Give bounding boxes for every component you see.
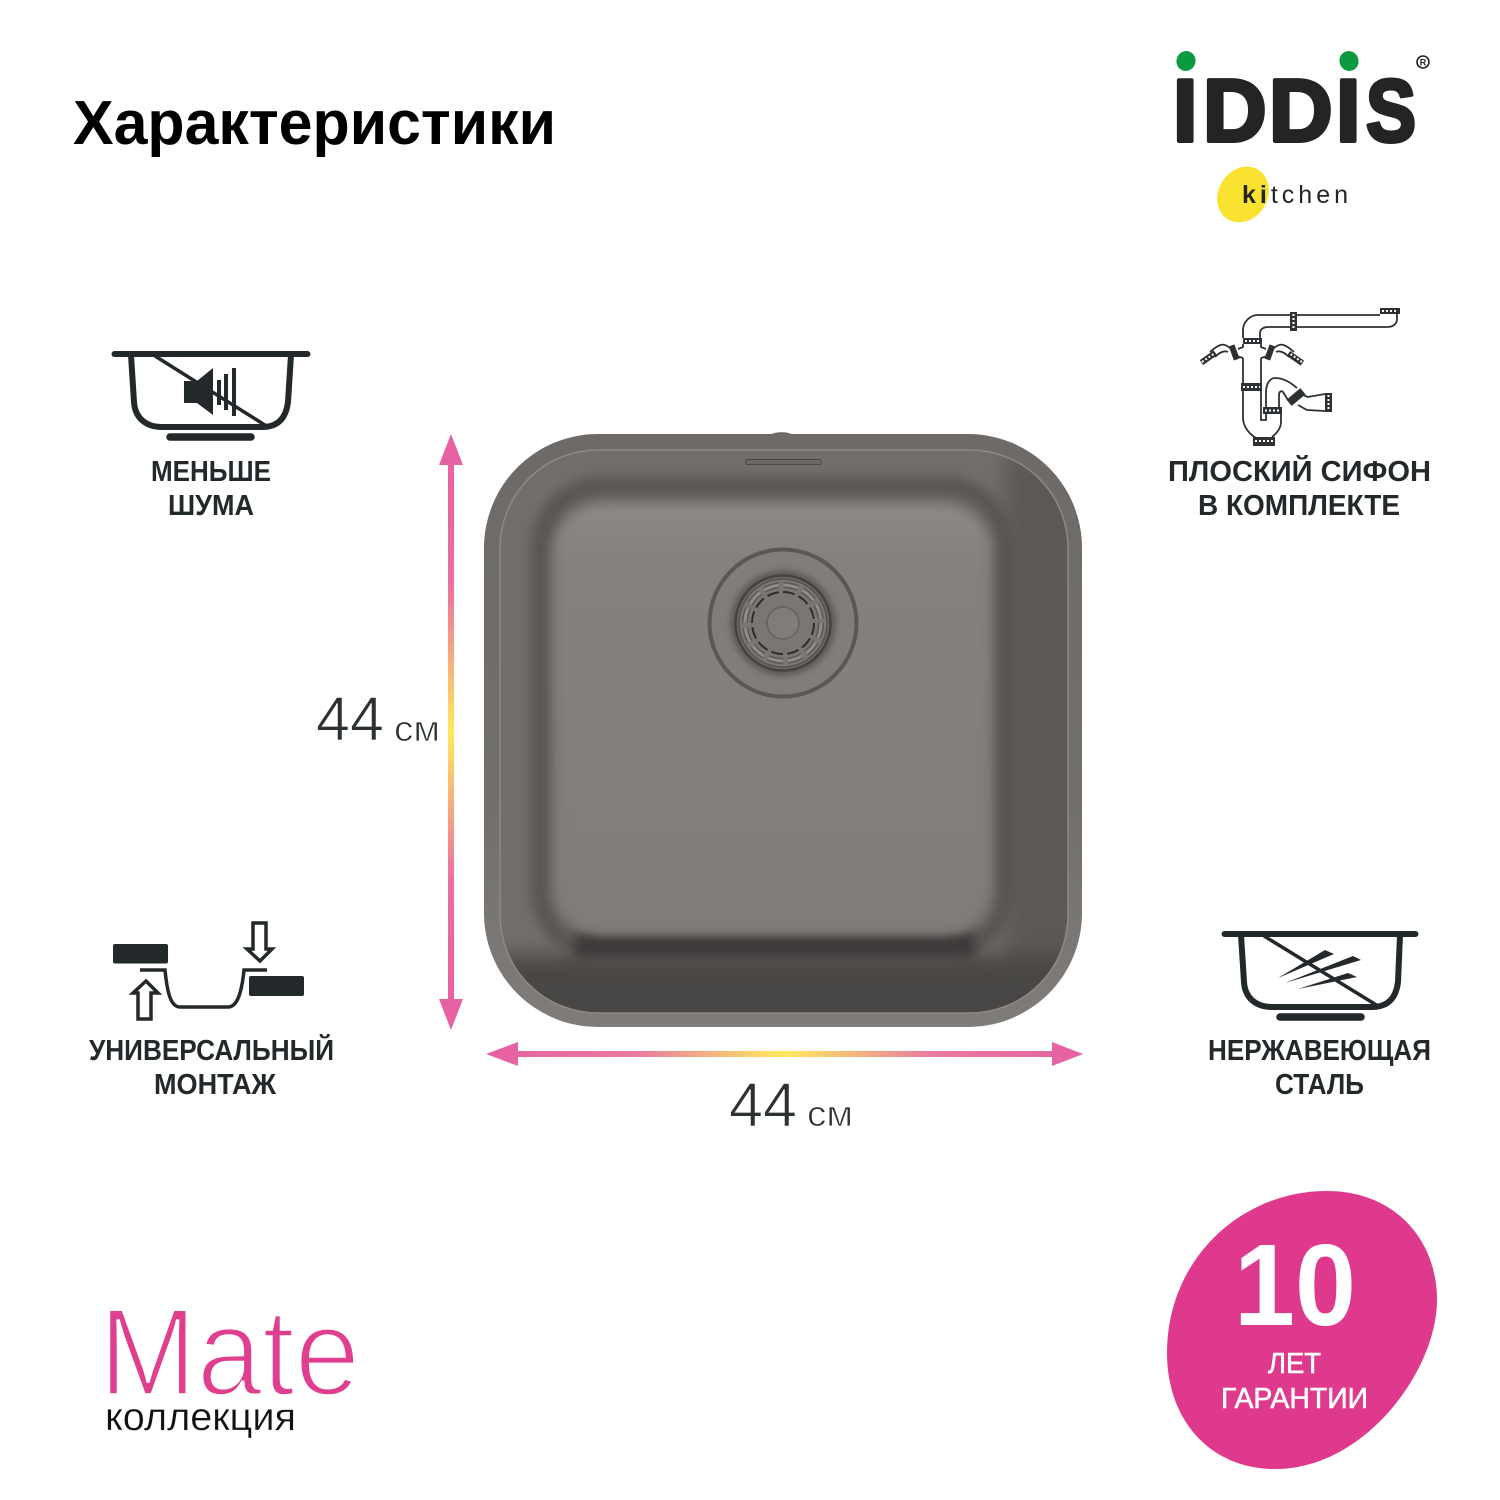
warranty text: ЛЕТ xyxy=(1268,1348,1321,1380)
height label xyxy=(316,685,440,754)
label: less noise: МЕНЬШЕ xyxy=(151,456,271,488)
sink bowl shading xyxy=(502,459,1068,1012)
title: Характеристики xyxy=(73,89,556,158)
icon: quiet sink xyxy=(114,354,308,437)
sink xyxy=(484,432,1085,1035)
icon and label: less noise xyxy=(114,354,308,522)
warranty years: 10 xyxy=(1234,1220,1356,1350)
sink inner edge xyxy=(500,450,1068,1013)
width label: 44 xyxy=(729,1071,797,1140)
label: flat siphon: ПЛОСКИЙ СИФОН xyxy=(1168,455,1431,488)
collection caption: коллекция xyxy=(105,1396,296,1439)
drain xyxy=(710,550,856,696)
warranty badge xyxy=(1167,1191,1437,1469)
logo yellow blob xyxy=(1207,157,1279,232)
height label: см xyxy=(394,708,440,749)
icon: siphon xyxy=(1200,308,1400,446)
logo green dots xyxy=(1174,48,1361,74)
height label: 44 xyxy=(316,685,384,754)
Mate wordmark: Mate xyxy=(99,1284,360,1422)
label: less noise xyxy=(151,456,271,522)
label: universal mounting: МОНТАЖ xyxy=(154,1069,276,1101)
logo wordmark: IDDI xyxy=(1173,61,1360,160)
label: stainless steel: НЕРЖАВЕЮЩАЯ xyxy=(1208,1035,1431,1067)
icon and label: universal mounting xyxy=(89,923,334,1101)
label: universal mounting: УНИВЕРСАЛЬНЫЙ xyxy=(89,1034,334,1067)
horizontal dimension arrow xyxy=(486,1042,1083,1066)
icon and label: stainless steel xyxy=(1208,934,1431,1101)
sink rim xyxy=(484,434,1082,1027)
logo: IDDIS kitchen xyxy=(1173,48,1429,232)
collection name xyxy=(99,1284,360,1439)
label: flat siphon: В КОМПЛЕКТЕ xyxy=(1198,490,1400,522)
registered mark: R xyxy=(1420,58,1427,68)
logo kitchen text: kitchen xyxy=(1242,181,1352,209)
label: less noise: ШУМА xyxy=(168,490,254,522)
label: universal mounting xyxy=(89,1034,334,1101)
icon: mounting xyxy=(113,923,304,1019)
width label xyxy=(729,1071,853,1140)
warranty text xyxy=(1221,1348,1368,1415)
label: stainless steel: СТАЛЬ xyxy=(1275,1069,1364,1101)
label: flat siphon xyxy=(1168,455,1431,522)
label: stainless steel xyxy=(1208,1035,1431,1101)
icon and label: flat siphon xyxy=(1168,308,1431,522)
width label: см xyxy=(807,1093,853,1134)
sink top knob xyxy=(769,432,794,436)
warranty text: ГАРАНТИИ xyxy=(1221,1383,1368,1415)
overflow slot xyxy=(746,460,821,464)
icon: stainless sink xyxy=(1224,934,1416,1017)
registered mark xyxy=(1417,56,1429,68)
logo wordmark: S xyxy=(1366,61,1416,160)
badge blob xyxy=(1167,1191,1437,1469)
vertical dimension arrow xyxy=(439,434,463,1030)
